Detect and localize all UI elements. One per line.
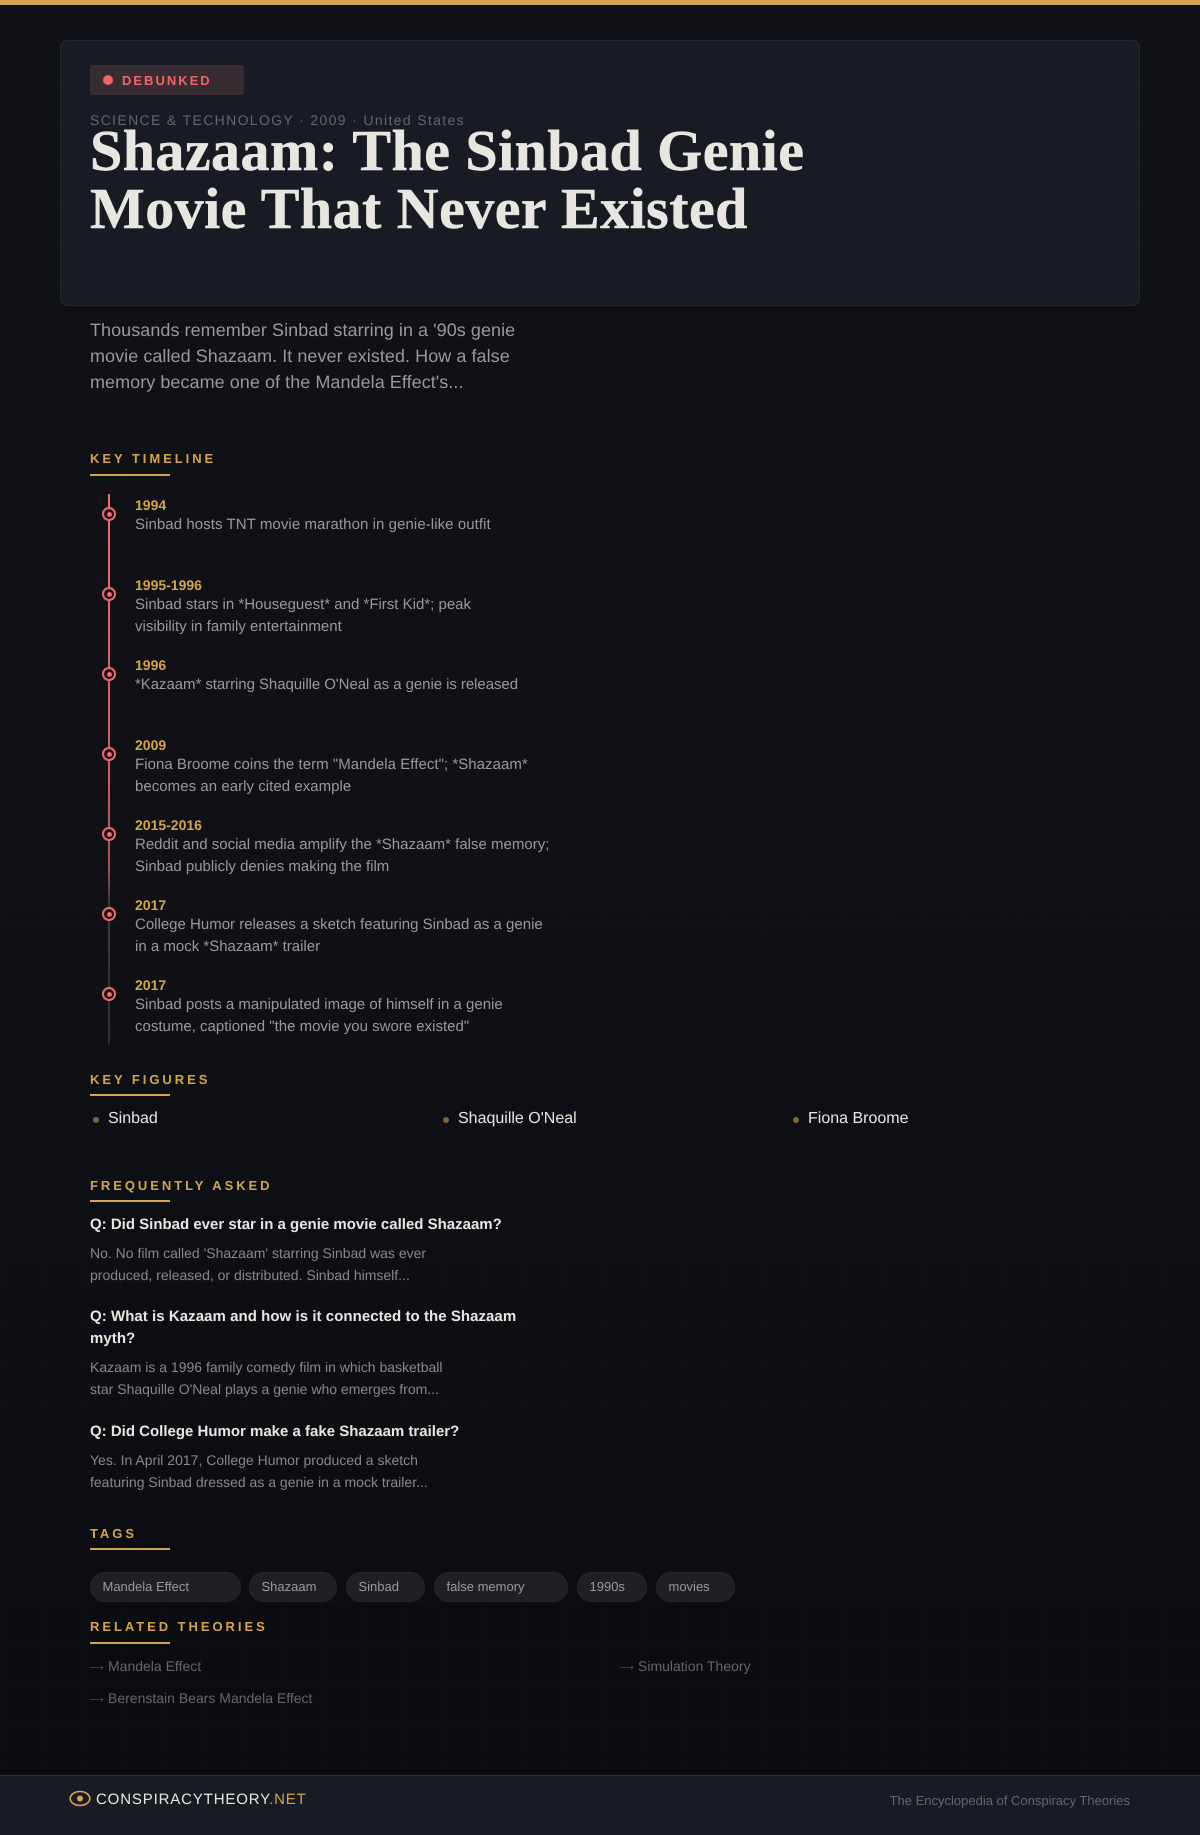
- event: 1995-1996: Sinbad stars in *Houseguest* and *First Kid*; peak: [135, 596, 471, 613]
- event: 2009: 2009: [135, 737, 166, 753]
- event: 2017 sketch: 2017: [135, 897, 166, 913]
- event: 2017 sketch: College Humor releases a sketch featuring Sinbad as a genie: [135, 916, 543, 933]
- tagline: The Encyclopedia of Conspiracy Theories: [890, 1793, 1130, 1808]
- event: 2017 sketch: [102, 897, 543, 955]
- faq item 2: myth?: [90, 1330, 135, 1347]
- event: 1994: [102, 497, 491, 533]
- event: 2015-2016: Reddit and social media amplify the *Shazaam* false memory;: [135, 836, 549, 853]
- faq item 1: produced, released, or distributed. Sinbad himself...: [90, 1267, 410, 1283]
- heading: related theories: RELATED THEORIES: [90, 1619, 268, 1634]
- tag: false memory: [434, 1572, 568, 1602]
- event: 1996: *Kazaam* starring Shaquille O'Neal as a genie is released: [135, 676, 518, 693]
- tag: false memory: false memory: [446, 1579, 525, 1594]
- badge label: DEBUNKED: [122, 73, 212, 88]
- title: Movie That Never Existed: [90, 176, 748, 241]
- event: 2009: [102, 737, 528, 795]
- related link: Mandela Effect: Mandela Effect: [108, 1658, 201, 1674]
- tag: movies: movies: [668, 1579, 710, 1594]
- tag: Mandela Effect: [90, 1572, 241, 1602]
- tag: Shazaam: [249, 1572, 337, 1602]
- title: [90, 118, 804, 241]
- top accent bar: [0, 0, 1200, 5]
- event: 2009: Fiona Broome coins the term "Mandela Effect"; *Shazaam*: [135, 756, 528, 773]
- event: 2009: becomes an early cited example: [135, 778, 351, 795]
- event: 1995-1996: visibility in family entertainment: [135, 618, 342, 635]
- heading: key timeline: KEY TIMELINE: [90, 451, 216, 466]
- figure: Fiona Broome: Fiona Broome: [808, 1110, 908, 1127]
- tag: 1990s: 1990s: [590, 1579, 625, 1594]
- event: 1994: Sinbad hosts TNT movie marathon in genie-like outfit: [135, 516, 491, 533]
- tag: Mandela Effect: Mandela Effect: [102, 1579, 189, 1594]
- tag list: [90, 1572, 735, 1602]
- faq item 3: featuring Sinbad dressed as a genie in a mock trailer...: [90, 1474, 428, 1490]
- faq item 3: [90, 1423, 459, 1490]
- figure: Shaquille O'Neal: Shaquille O'Neal: [458, 1110, 577, 1127]
- faq item 2: [90, 1308, 516, 1397]
- tag: Sinbad: [346, 1572, 425, 1602]
- faq item 2: Kazaam is a 1996 family comedy film in which basketball: [90, 1359, 442, 1375]
- tag: movies: [656, 1572, 735, 1602]
- related link: Berenstain Bears Mandela Effect: Berenstain Bears Mandela Effect: [108, 1690, 312, 1706]
- event: 2015-2016: [102, 817, 549, 875]
- title: Shazaam: The Sinbad Genie: [90, 118, 804, 183]
- event: 2017 image: costume, captioned "the movie you swore existed": [135, 1018, 469, 1035]
- faq item 2: star Shaquille O'Neal plays a genie who emerges from...: [90, 1381, 439, 1397]
- event: 2015-2016: Sinbad publicly denies making the film: [135, 858, 389, 875]
- event: 1994: 1994: [135, 497, 166, 513]
- figure: Sinbad: Sinbad: [108, 1110, 158, 1127]
- intro text: Thousands remember Sinbad starring in a '90s genie: [90, 320, 515, 340]
- event: 2017 sketch: in a mock *Shazaam* trailer: [135, 938, 320, 955]
- tag: Shazaam: Shazaam: [262, 1579, 316, 1594]
- icon: eye logo: [69, 1790, 91, 1806]
- logo wordmark: CONSPIRACYTHEORY.NET: [96, 1791, 307, 1808]
- event: 1995-1996: [102, 577, 471, 635]
- footer: [0, 1775, 1200, 1835]
- intro text: memory became one of the Mandela Effect's...: [90, 372, 464, 392]
- heading: key figures: KEY FIGURES: [90, 1072, 210, 1087]
- intro text: [90, 320, 515, 392]
- faq item 1: Q: Did Sinbad ever star in a genie movie called Shazaam?: [90, 1216, 502, 1233]
- faq item 3: Yes. In April 2017, College Humor produced a sketch: [90, 1452, 418, 1468]
- panel: header card: [60, 40, 1140, 306]
- tag: Sinbad: Sinbad: [358, 1579, 399, 1594]
- faq item 2: Q: What is Kazaam and how is it connected to the Shazaam: [90, 1308, 516, 1325]
- event: 2017 image: Sinbad posts a manipulated image of himself in a genie: [135, 996, 503, 1013]
- event: 2017 image: 2017: [135, 977, 166, 993]
- event: 1996: 1996: [135, 657, 166, 673]
- faq item 1: No. No film called 'Shazaam' starring Sinbad was ever: [90, 1245, 426, 1261]
- related link: Simulation Theory: Simulation Theory: [638, 1658, 751, 1674]
- event: 1996: [102, 657, 518, 693]
- badge dot: [103, 75, 113, 85]
- faq item 3: Q: Did College Humor make a fake Shazaam trailer?: [90, 1423, 459, 1440]
- event: 2015-2016: 2015-2016: [135, 817, 202, 833]
- timeline spine: [108, 494, 110, 1044]
- category meta line: SCIENCE & TECHNOLOGY · 2009 · United States: [90, 112, 465, 128]
- heading: frequently asked: FREQUENTLY ASKED: [90, 1178, 273, 1193]
- intro text: movie called Shazaam. It never existed. How a false: [90, 346, 510, 366]
- event: 1995-1996: 1995-1996: [135, 577, 202, 593]
- faq item 1: [90, 1216, 502, 1283]
- heading: tags: TAGS: [90, 1526, 137, 1541]
- event: 2017 image: [102, 977, 503, 1035]
- tag: 1990s: [577, 1572, 647, 1602]
- status badge: debunked: [90, 65, 244, 95]
